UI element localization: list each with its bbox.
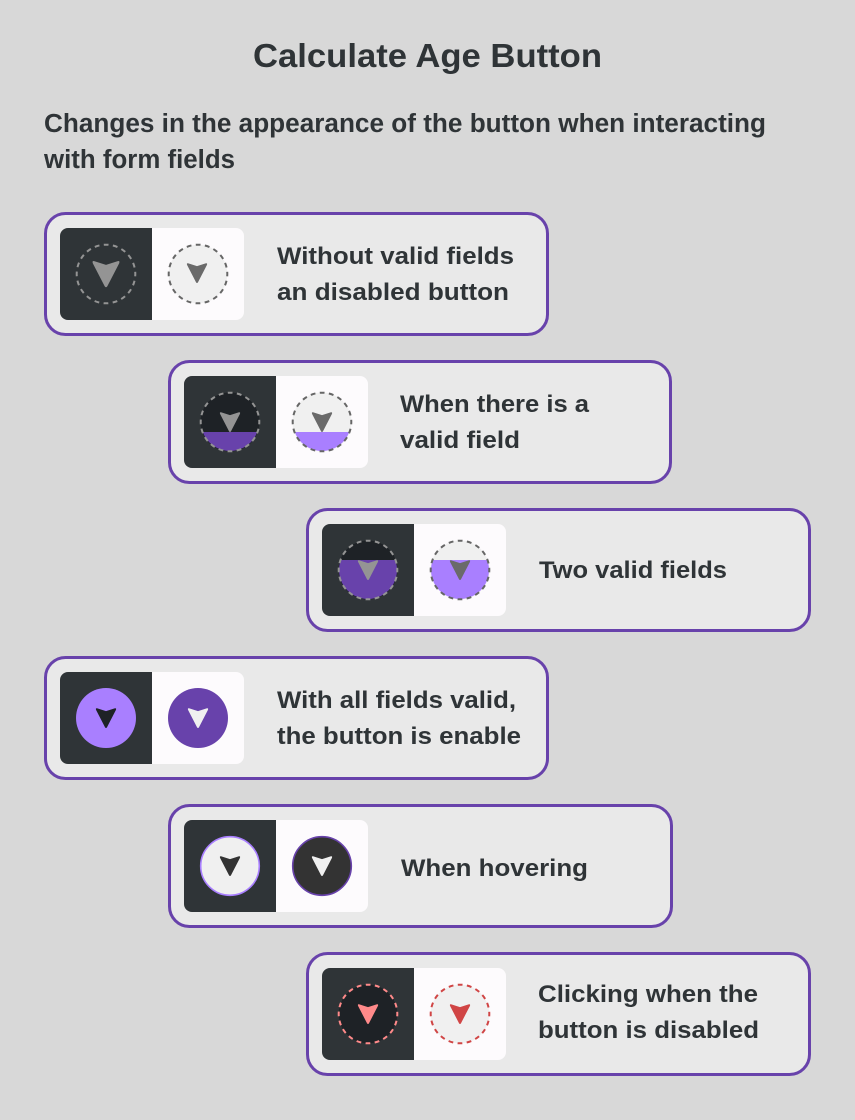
- label: valid field: [400, 427, 520, 454]
- icon: two thirds filled on dark: [338, 540, 398, 600]
- icon: hover button on light: [293, 837, 351, 895]
- label: button is disabled: [538, 1017, 759, 1044]
- icon: hover button on dark: [201, 837, 259, 895]
- label: Clicking when the: [538, 981, 758, 1008]
- icon: one third filled on light: [292, 392, 352, 452]
- label: Without valid fields: [277, 243, 514, 270]
- panel: two valid fields: [308, 510, 810, 630]
- icon: two thirds filled on light: [430, 540, 490, 600]
- subtitle: with form fields: [43, 146, 235, 174]
- icon: disabled button on light: [169, 245, 227, 303]
- icon: error button on dark: [339, 985, 397, 1043]
- subtitle: [43, 110, 766, 174]
- subtitle: Changes in the appearance of the button when interacting: [44, 110, 766, 138]
- label: the button is enable: [277, 723, 521, 750]
- label: [538, 981, 759, 1044]
- title: Calculate Age Button: [253, 37, 602, 74]
- icon: one third filled on dark: [200, 392, 260, 452]
- panel: hovering: [170, 806, 672, 926]
- icon: enabled button on light: [168, 688, 228, 748]
- label: an disabled button: [277, 279, 509, 306]
- icon: disabled button on dark: [77, 245, 135, 303]
- label: When hovering: [401, 855, 588, 882]
- label: Two valid fields: [539, 557, 727, 584]
- label: When there is a: [400, 391, 589, 418]
- label: With all fields valid,: [277, 687, 516, 714]
- label: [400, 391, 589, 454]
- panel: all fields valid: [46, 658, 548, 778]
- label: [277, 243, 514, 306]
- panel: without valid fields: [46, 214, 548, 334]
- label: [277, 687, 521, 750]
- icon: enabled button on dark: [76, 688, 136, 748]
- panel: one valid field: [170, 362, 670, 482]
- panel: clicking when disabled: [308, 954, 810, 1074]
- icon: error button on light: [431, 985, 489, 1043]
